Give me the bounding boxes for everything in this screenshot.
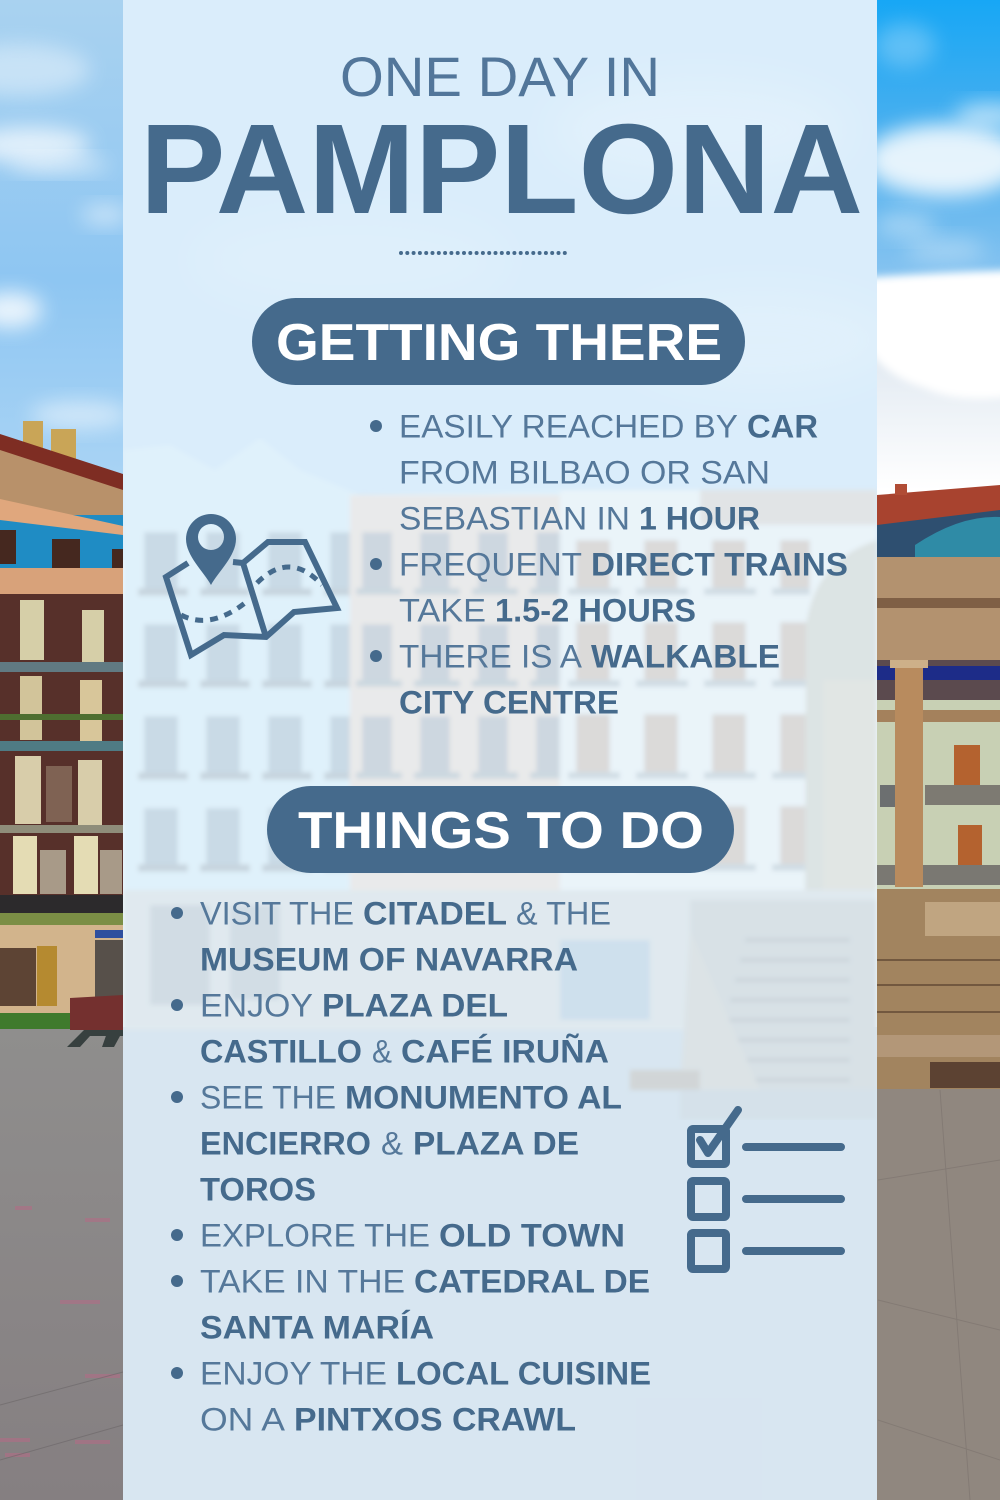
text block: things to do list: & <box>381 1126 403 1162</box>
text block: getting there list: CITY CENTRE <box>399 685 619 721</box>
text block: things to do list: ENJOY <box>200 988 313 1024</box>
sky <box>0 0 1000 560</box>
text block: getting there list: CAR <box>747 409 818 445</box>
clouds <box>0 44 130 429</box>
text block: things to do list <box>171 896 651 1438</box>
text block: things to do list: CASTILLO <box>200 1034 362 1070</box>
faded facade, stairs and bandstand through panel <box>124 490 877 1093</box>
text block: things to do list: VISIT THE <box>200 896 354 932</box>
ground <box>0 1027 123 1500</box>
text block: getting there list: SEBASTIAN IN <box>399 501 630 537</box>
text block: things to do list: ON A <box>200 1402 285 1438</box>
text block: things to do list: CITADEL <box>363 896 507 932</box>
icon: map with pin <box>166 514 337 655</box>
heading: things to do: THINGS TO DO <box>298 802 704 860</box>
heading: things to do <box>267 786 734 873</box>
text block: getting there list: THERE IS A <box>399 639 582 675</box>
text block: things to do list: MONUMENTO AL <box>345 1080 622 1116</box>
left building <box>0 421 123 1013</box>
text block: things to do list: SANTA MARÍA <box>200 1309 434 1346</box>
text block: things to do list: EXPLORE THE <box>200 1218 430 1254</box>
text block: things to do list: CAFÉ IRUÑA <box>401 1033 609 1070</box>
heading: getting there <box>252 298 745 385</box>
text block: getting there list <box>370 409 848 721</box>
icon: checklist <box>691 1110 841 1269</box>
title line: one day in: ONE DAY IN <box>340 45 660 108</box>
text block: things to do list: LOCAL CUISINE <box>396 1356 651 1392</box>
text block: things to do list: CATEDRAL DE <box>414 1264 650 1300</box>
text block: getting there list: FREQUENT <box>399 547 582 583</box>
text block: getting there list: FROM BILBAO OR SAN <box>399 455 770 491</box>
title line: Pamplona: PAMPLONA <box>140 98 863 241</box>
paving marks <box>0 1208 120 1455</box>
bench <box>67 995 123 1047</box>
text block: things to do list: TAKE IN THE <box>200 1264 405 1300</box>
heading: getting there: GETTING THERE <box>276 314 722 372</box>
text block: things to do list: PLAZA DEL <box>322 988 508 1024</box>
title <box>140 45 863 241</box>
text block: things to do list: MUSEUM OF NAVARRA <box>200 942 578 978</box>
text block: things to do list: PINTXOS CRAWL <box>294 1402 576 1438</box>
text block: getting there list: 1.5-2 HOURS <box>495 593 696 629</box>
text block: things to do list: OLD TOWN <box>439 1218 625 1254</box>
text block: getting there list: DIRECT TRAINS <box>591 547 848 583</box>
text block: getting there list: TAKE <box>399 593 486 629</box>
translucent centre panel <box>123 0 877 1500</box>
text block: things to do list: ENCIERRO <box>200 1126 371 1162</box>
text block: getting there list: WALKABLE <box>591 639 780 675</box>
right bandstand <box>877 484 1000 1089</box>
text block: things to do list: SEE THE <box>200 1080 336 1116</box>
text block: things to do list: & <box>372 1034 392 1070</box>
text block: things to do list: ENJOY THE <box>200 1356 387 1392</box>
dotted divider <box>401 251 565 255</box>
text block: getting there list: 1 HOUR <box>639 501 760 537</box>
text block: things to do list: TOROS <box>200 1172 316 1208</box>
text block: getting there list: EASILY REACHED BY <box>399 409 738 445</box>
text block: things to do list: PLAZA DE <box>413 1126 579 1162</box>
text block: things to do list: & THE <box>516 896 611 932</box>
